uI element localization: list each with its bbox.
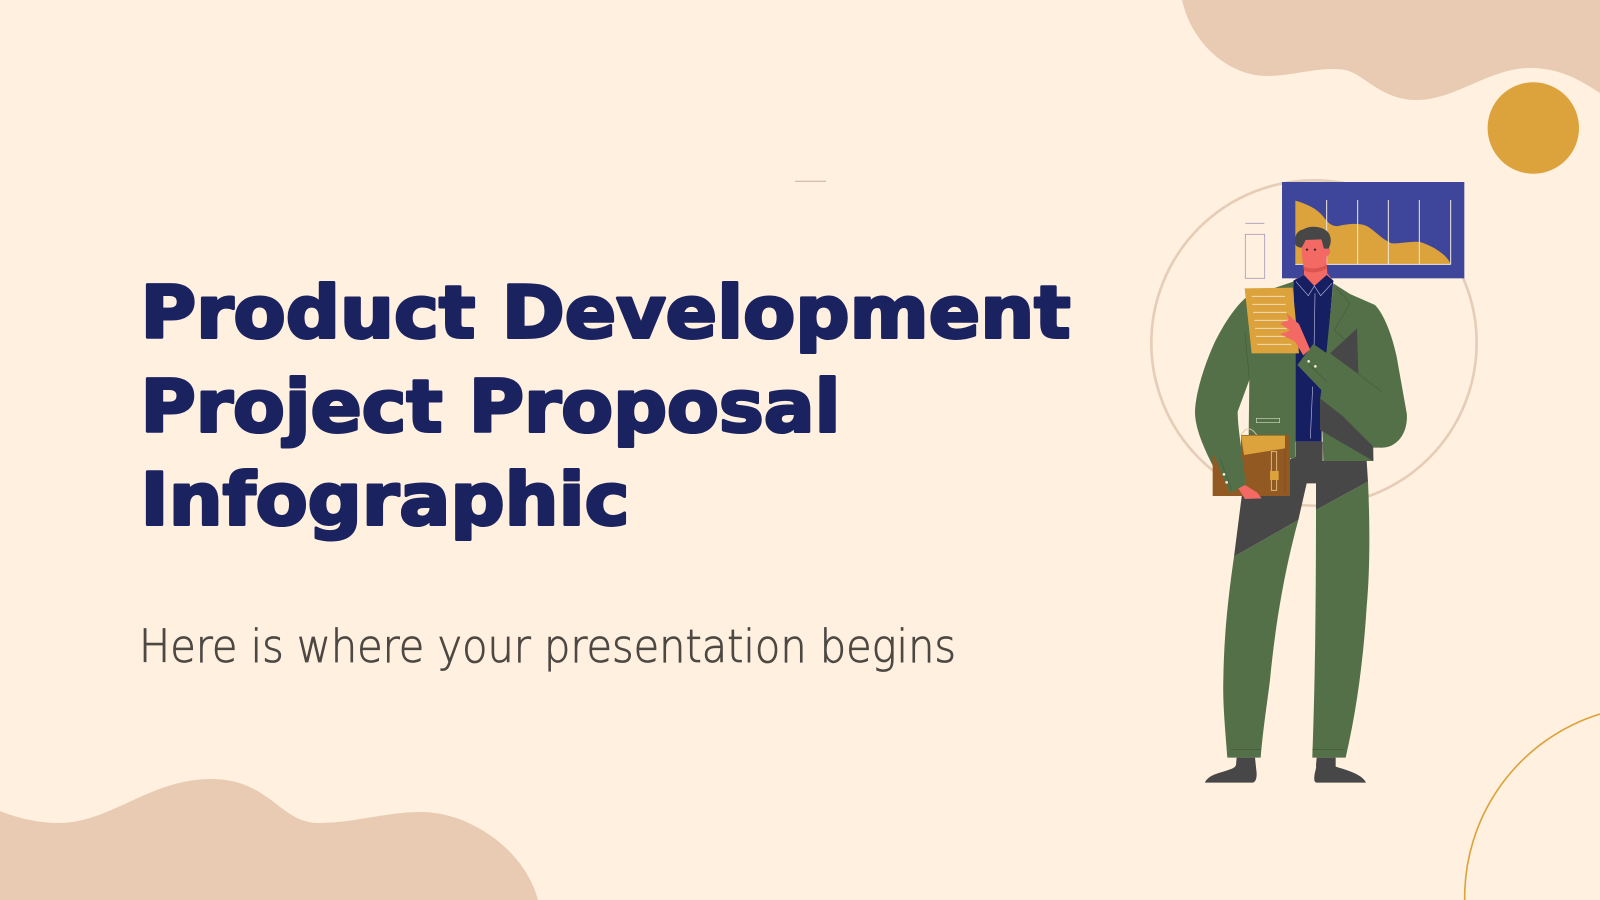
neck and head: [1295, 227, 1334, 286]
small dash above title: [795, 181, 826, 182]
jacket: [1195, 282, 1407, 493]
shirt: [1293, 275, 1333, 442]
subtitle: Here is where your presentation begins: [139, 620, 956, 673]
pocket: [1256, 418, 1280, 423]
title: Project Proposal: [140, 364, 841, 448]
title: Infographic: [140, 458, 630, 542]
trousers and legs: [1223, 442, 1369, 758]
briefcase: [1213, 429, 1290, 496]
sleeve buttons: [1307, 360, 1317, 368]
dark lining lower: [1320, 398, 1373, 461]
gold circle: top right: [1488, 82, 1579, 174]
title: Product Development: [140, 270, 1070, 354]
outlined bar glyph: [1245, 223, 1265, 278]
title: [140, 270, 1070, 542]
illustration: businessman with chart: [1151, 180, 1477, 783]
dark lining upper: [1330, 328, 1358, 374]
hand holding document: [1280, 313, 1310, 355]
ring behind figure: [1151, 180, 1477, 506]
jacket right side: [1320, 283, 1407, 461]
document: [1245, 288, 1299, 353]
arc outline: bottom right: [1465, 714, 1600, 900]
jacket left side and arm: [1195, 282, 1295, 493]
right sleeve: [1297, 344, 1407, 448]
hand on briefcase: [1238, 485, 1262, 499]
blob: bottom left: [0, 779, 538, 900]
blob: top right: [1182, 0, 1600, 100]
lower sleeve over briefcase: [1213, 453, 1246, 493]
chart panel: [1282, 182, 1464, 278]
shoes: [1205, 758, 1366, 783]
